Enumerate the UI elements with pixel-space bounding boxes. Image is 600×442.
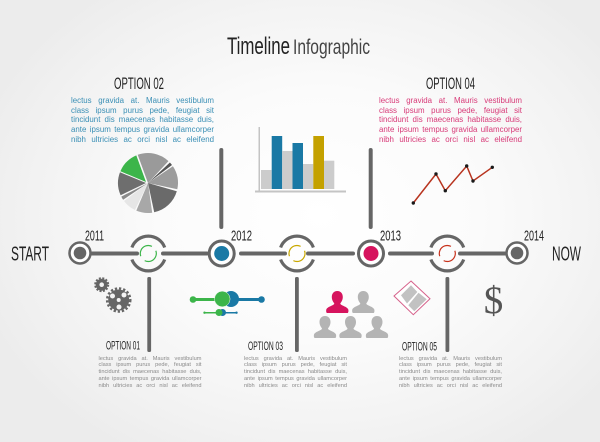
- text block: option 04: [379, 96, 522, 144]
- text block: option 02: nibh ultricies ac orci nisl ac eleifend: [71, 135, 214, 144]
- icon: pie chart: [118, 153, 178, 213]
- node: red ring: [431, 236, 464, 271]
- text block: option 01: lectus gravida at. Mauris vestibulum: [98, 356, 202, 362]
- text block: option 03: lectus gravida at. Mauris vestibulum: [244, 356, 347, 362]
- text block: option 01: [98, 356, 202, 389]
- heading: option 05: OPTION 05: [402, 340, 437, 354]
- icon: dollar sign: $: [484, 279, 503, 322]
- text block: option 05: tincidunt dis maecenas habitasse duis,: [399, 369, 502, 375]
- text block: option 01: nibh ultricies ac orci nisl ac eleifend: [98, 383, 202, 389]
- node: 2013: [358, 241, 384, 266]
- icon: gears: [95, 278, 130, 312]
- heading: option 02: OPTION 02: [114, 75, 164, 93]
- timeline line: [92, 252, 505, 256]
- text block: option 02: ante ipsum tempus gravida ullamcorper: [71, 125, 214, 134]
- text block: option 05: [399, 356, 502, 389]
- text block: option 04: tincidunt dis maecenas habitasse duis,: [379, 115, 522, 124]
- text block: option 01: ante ipsum tempus gravida ullamcorper: [98, 376, 202, 382]
- text block: option 02: tincidunt dis maecenas habitasse duis,: [71, 115, 214, 124]
- node: yellow ring: [281, 236, 313, 271]
- text block: option 04: nibh ultricies ac orci nisl ac eleifend: [379, 135, 522, 144]
- title: [227, 33, 370, 60]
- text block: option 05: lectus gravida at. Mauris vestibulum: [399, 356, 502, 362]
- heading: option 01: OPTION 01: [106, 338, 140, 352]
- text block: option 03: [244, 356, 347, 389]
- text block: option 02: class ipsum purus pede, feugiat sit: [71, 106, 214, 115]
- label: 2011: 2011: [85, 228, 104, 244]
- connector: 2012 upward bar: [219, 148, 223, 229]
- label: 2012: 2012: [231, 228, 252, 244]
- text block: option 03: class ipsum purus pede, feugiat sit: [244, 362, 347, 368]
- title: Infographic: [293, 36, 370, 59]
- label: 2013: 2013: [380, 228, 401, 244]
- text block: option 02: [71, 96, 214, 144]
- icon: sliders: [190, 291, 265, 316]
- node: 2014: [506, 242, 528, 264]
- label: start: START: [11, 244, 49, 266]
- text block: option 02: lectus gravida at. Mauris vestibulum: [71, 96, 214, 105]
- text block: option 01: class ipsum purus pede, feugiat sit: [98, 362, 202, 368]
- text block: option 04: ante ipsum tempus gravida ullamcorper: [379, 125, 522, 134]
- icon: line chart: [412, 164, 494, 205]
- connector: option 01 downward bar: [147, 277, 151, 352]
- title: Timeline: [227, 33, 290, 60]
- text block: option 01: tincidunt dis maecenas habitasse duis,: [98, 369, 202, 375]
- text block: option 05: nibh ultricies ac orci nisl ac eleifend: [399, 383, 502, 389]
- label: 2014: 2014: [524, 228, 544, 244]
- text block: option 05: class ipsum purus pede, feugiat sit: [399, 362, 502, 368]
- text block: option 03: tincidunt dis maecenas habitasse duis,: [244, 369, 347, 375]
- node: green ring: [132, 236, 165, 271]
- node: 2012: [209, 241, 234, 266]
- icon: bar chart: [255, 127, 346, 192]
- connector: 2013 upward bar: [369, 148, 373, 229]
- connector: option 05 downward bar: [446, 277, 449, 352]
- heading: option 03: OPTION 03: [248, 339, 283, 353]
- text block: option 03: ante ipsum tempus gravida ullamcorper: [244, 376, 347, 382]
- icon: open book: [394, 281, 430, 315]
- icon: people: [314, 291, 388, 338]
- text block: option 05: ante ipsum tempus gravida ullamcorper: [399, 376, 502, 382]
- text block: option 04: lectus gravida at. Mauris vestibulum: [379, 96, 522, 105]
- label: now: NOW: [552, 244, 581, 266]
- text block: option 04: class ipsum purus pede, feugiat sit: [379, 106, 522, 115]
- node: 2011: [70, 242, 90, 264]
- text block: option 03: nibh ultricies ac orci nisl ac eleifend: [244, 383, 347, 389]
- connector: option 03 downward bar: [295, 277, 299, 352]
- heading: option 04: OPTION 04: [426, 75, 475, 93]
